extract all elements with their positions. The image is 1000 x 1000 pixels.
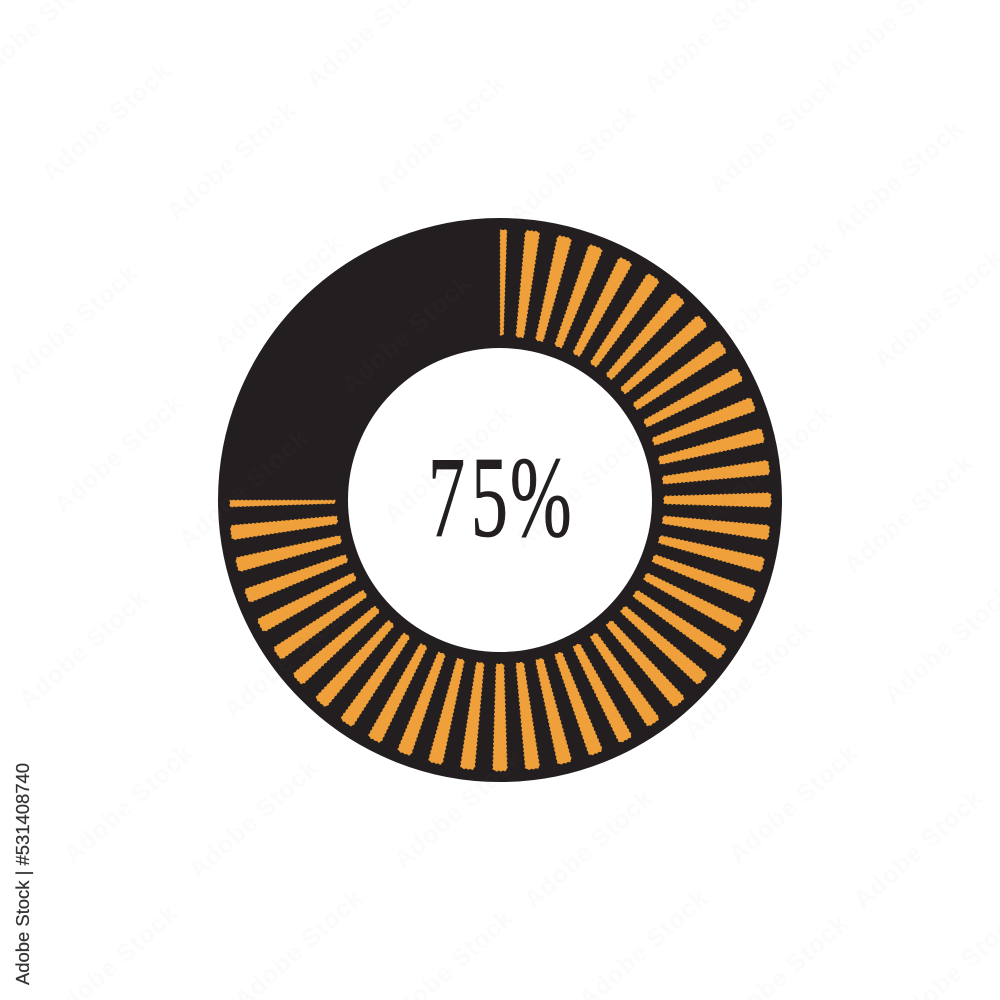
watermark pattern: Adobe Stock [161,96,302,226]
orange radial ticks showing 75 percent [230,230,771,771]
watermark pattern: Adobe Stock [173,424,314,554]
center percentage label: 75% [428,434,572,562]
watermark pattern: Adobe Stock [208,229,349,359]
watermark pattern: Adobe Stock [183,754,324,884]
donut ring background [283,283,717,717]
watermark pattern: Adobe Stock [370,69,511,199]
watermark pattern: Adobe Stock [838,449,979,579]
watermark pattern: Adobe Stock [218,594,359,724]
watermark pattern: Adobe Stock [698,399,839,529]
watermark pattern: Adobe Stock [678,614,819,744]
watermark pattern: Adobe Stock [36,57,177,187]
watermark pattern: Adobe Stock [388,744,529,874]
watermark pattern: Adobe Stock [848,784,989,914]
watermark pattern: Adobe Stock [508,424,649,554]
watermark pattern: Adobe Stock [58,739,199,869]
watermark pattern: Adobe Stock [48,389,189,519]
watermark pattern: Adobe Stock [828,114,969,244]
watermark pattern: Adobe Stock [13,584,154,714]
watermark pattern: Adobe Stock [336,269,477,399]
watermark pattern: Adobe Stock [503,99,644,229]
watermark pattern: Adobe Stock [3,259,144,389]
watermark pattern: Adobe Stock [698,234,839,364]
watermark pattern: Adobe Stock [518,784,659,914]
vertical stock id label: Adobe Stock | #531408740 [13,763,33,985]
watermark pattern: Adobe Stock [378,399,519,529]
watermark pattern: Adobe Stock [723,739,864,869]
watermark pattern: Adobe Stock [703,69,844,199]
